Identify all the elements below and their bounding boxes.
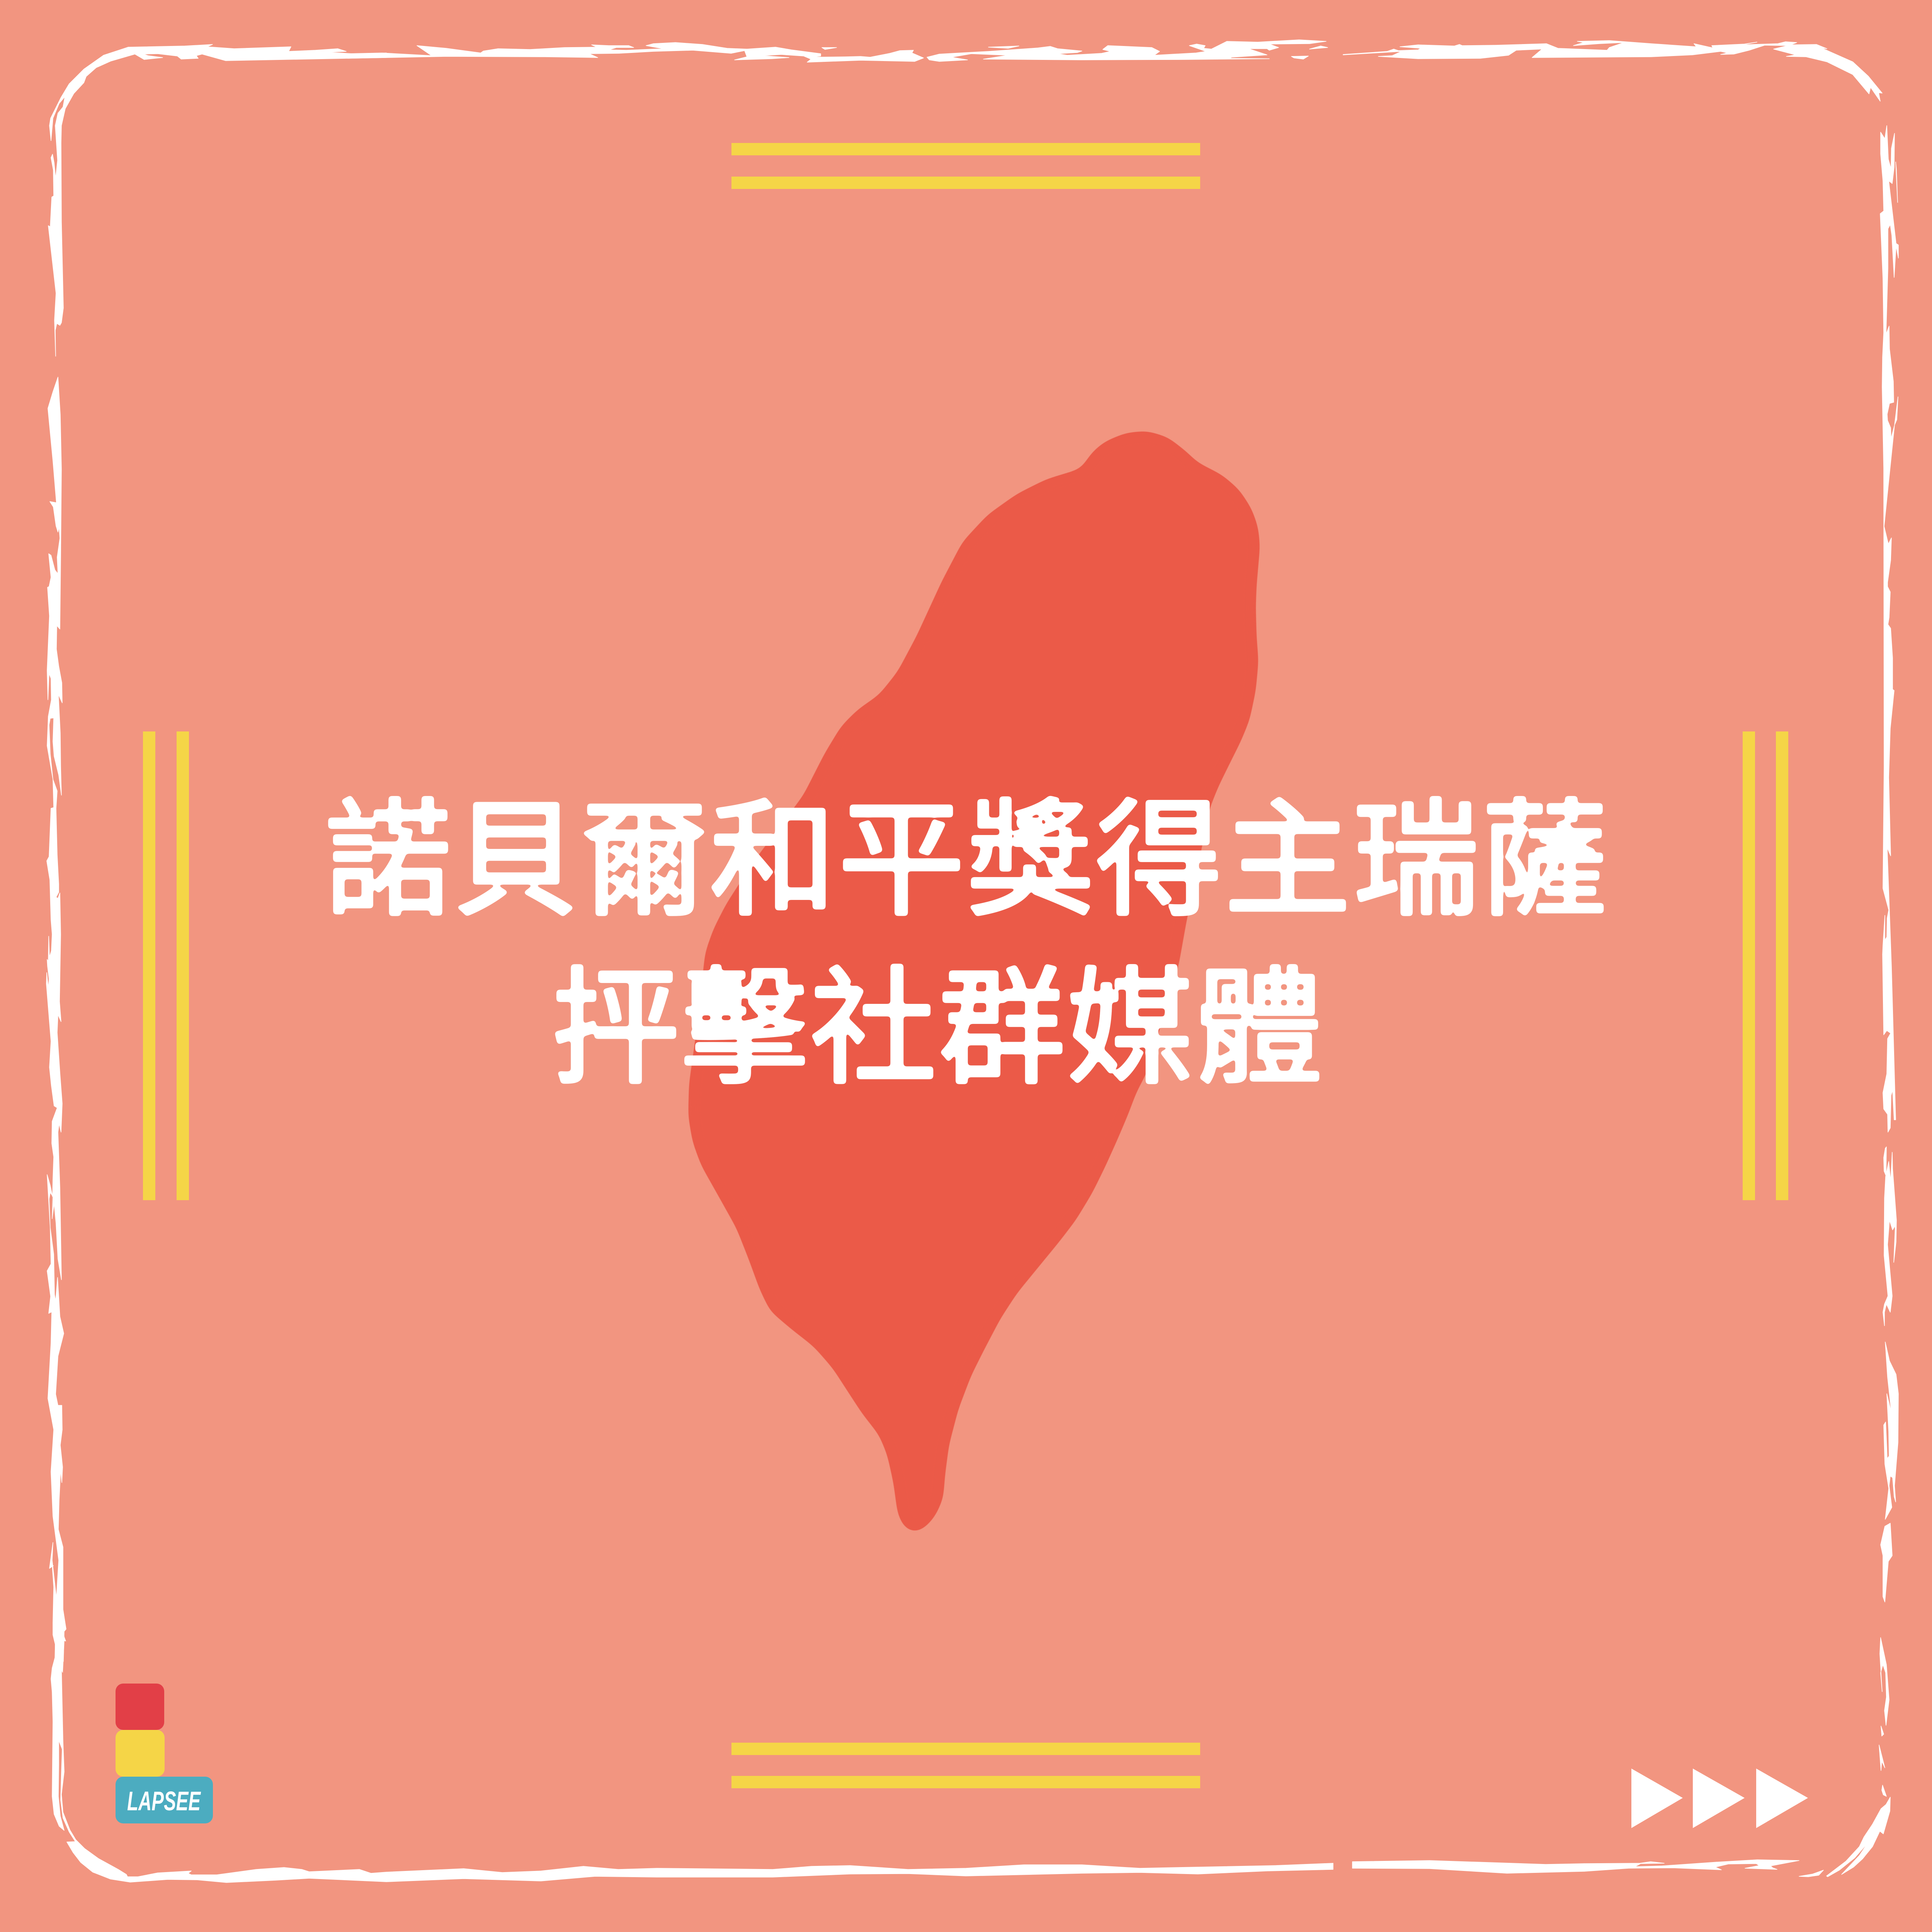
left yellow double bars <box>143 731 189 1200</box>
map of Taiwan <box>688 431 1260 1533</box>
logo: LAPSEE: LAPSEE <box>127 1786 201 1816</box>
title: 諾貝爾和平獎得主瑞薩 <box>325 789 1608 931</box>
icon: next-page arrows <box>1631 1769 1808 1828</box>
title: 抨擊社群媒體 <box>553 957 1323 1099</box>
top yellow double bars <box>731 143 1200 189</box>
bottom yellow double bars <box>731 1743 1200 1788</box>
title <box>325 789 1608 1099</box>
right yellow double bars <box>1743 731 1788 1200</box>
logo: LAPSEE <box>116 1684 213 1823</box>
